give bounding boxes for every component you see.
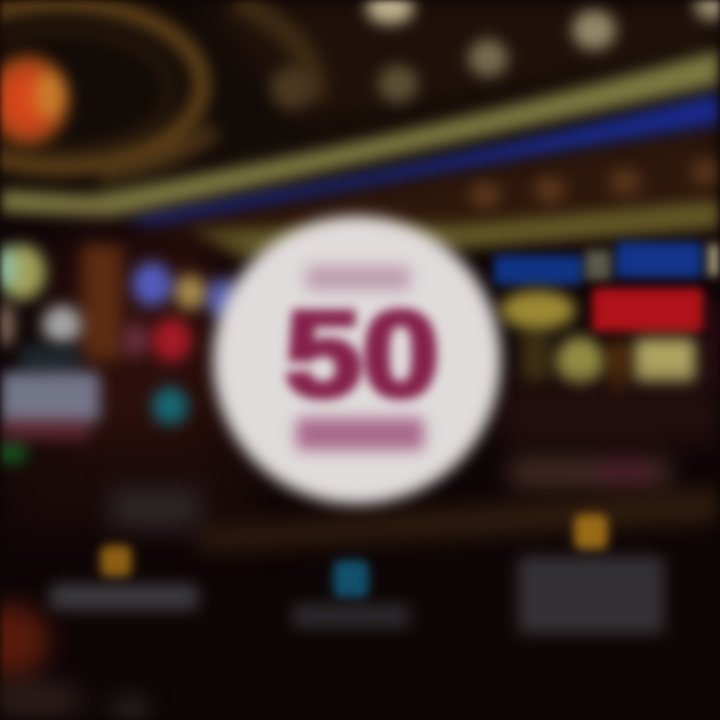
left mid section dark wall <box>0 240 260 530</box>
wall band under ceiling <box>130 125 720 240</box>
right red sign <box>592 288 704 332</box>
icon: blue marker center <box>333 560 369 598</box>
wooden column <box>82 245 122 360</box>
lower gold band <box>190 200 720 258</box>
text block: left caption <box>50 584 198 610</box>
machine bases <box>500 385 720 486</box>
icon: orange marker left <box>100 545 132 577</box>
icon: orange marker right <box>574 514 608 550</box>
table counter <box>110 488 720 550</box>
ceiling spotlights <box>270 0 720 110</box>
badge top line <box>306 266 410 290</box>
left colored lights <box>0 244 238 464</box>
bottom left glow <box>0 604 145 720</box>
badge number: 50 <box>285 286 439 422</box>
badge disc <box>213 216 501 504</box>
gold ceiling band <box>0 50 720 218</box>
blue ceiling band <box>120 92 720 226</box>
ceiling <box>0 0 720 190</box>
red glowing lamp <box>0 54 70 146</box>
left slot machine panel <box>0 345 100 440</box>
right slot machine lights <box>500 290 720 400</box>
badge lower line <box>296 418 424 450</box>
text block: center caption <box>292 604 410 628</box>
text block: right caption <box>518 556 664 634</box>
badge: circle with 50 <box>213 216 501 504</box>
wall niches <box>469 158 719 209</box>
ceiling arcs: gold rings <box>0 0 315 175</box>
right blue signs <box>494 242 720 285</box>
